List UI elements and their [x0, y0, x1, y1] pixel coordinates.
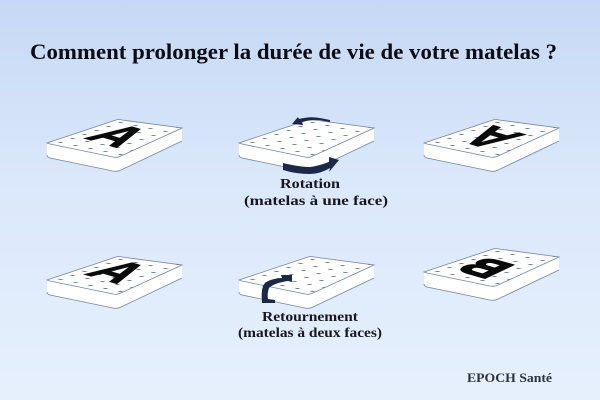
- label: two-sided mattress: (matelas à deux faces): [238, 326, 382, 341]
- arrow: rotation front: [283, 157, 339, 174]
- mattress: top middle, rotation: [239, 117, 374, 174]
- arrow: rotation rear: [292, 117, 330, 125]
- mattress: top left, side A: [47, 119, 182, 171]
- label: flip: Retournement: [262, 310, 358, 325]
- mattress: top right, side A rotated: [424, 120, 559, 171]
- title: Comment prolonger la durée de vie de votre matelas ?: [30, 39, 557, 64]
- mattress: bottom middle, flip: [239, 256, 374, 308]
- label: rotation: Rotation: [280, 177, 340, 192]
- mattress: bottom right, side B: B: [446, 252, 525, 283]
- mattress: bottom left, side A: A: [71, 255, 163, 289]
- label: one-sided mattress: (matelas à une face): [244, 194, 388, 209]
- source credit: EPOCH Santé: [467, 371, 552, 385]
- arrow: flip: [262, 275, 292, 303]
- mattress: top left, side A: A: [71, 119, 163, 153]
- mattress: bottom right, side B: [424, 248, 559, 300]
- mattress: bottom left, side A: [47, 255, 182, 308]
- mattress: top right, side A rotated: A: [447, 120, 539, 154]
